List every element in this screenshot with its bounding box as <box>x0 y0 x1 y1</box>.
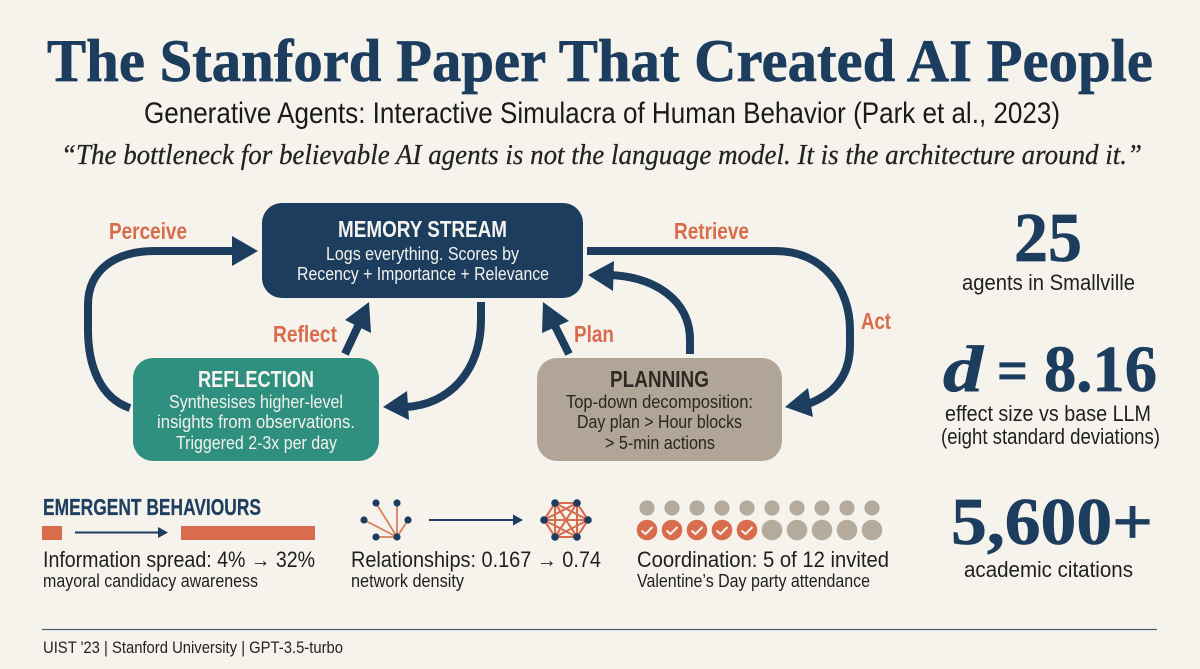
planning description: Day plan > Hour blocks <box>577 411 742 432</box>
panel: planning <box>537 358 782 461</box>
reflection description: Triggered 2-3x per day <box>176 432 338 453</box>
memory stream heading: MEMORY STREAM <box>338 216 507 242</box>
emergent behaviours heading: EMERGENT BEHAVIOURS <box>43 494 261 520</box>
icon: sparse network <box>360 499 412 541</box>
text: coordination <box>637 547 889 591</box>
stat: effect size: d <box>943 333 984 406</box>
bar chart: information spread <box>42 526 315 540</box>
stat: effect size: = <box>997 338 1028 404</box>
arrow: plan <box>542 302 569 354</box>
text: relationships: network density <box>351 571 464 591</box>
title: The Stanford Paper That Created AI People <box>47 28 1153 94</box>
subtitle: Generative Agents: Interactive Simulacra of Human Behavior (Park et al., 2023) <box>144 97 1060 130</box>
reflection description: insights from observations. <box>157 411 355 432</box>
network diagram: sparse to dense <box>360 499 592 541</box>
label: retrieve: Retrieve <box>674 218 749 244</box>
reflection description <box>157 391 355 453</box>
stat: citations: academic citations <box>964 557 1133 582</box>
text: relationships <box>351 547 601 591</box>
text: coordination: Coordination: 5 of 12 invited <box>637 547 889 572</box>
planning description: Top-down decomposition: <box>566 391 753 412</box>
stat: 25 agents: agents in Smallville <box>962 270 1135 295</box>
text: information spread: Information spread: 4% → 32% <box>43 547 315 572</box>
arrow: network <box>429 514 523 526</box>
arrow: retrieve and act <box>587 251 850 417</box>
text: coordination: Valentine’s Day party attendance <box>637 571 870 591</box>
arrow: planning to memory curve <box>588 261 690 354</box>
stat: effect size: (eight standard deviations) <box>941 424 1160 449</box>
reflection heading: REFLECTION <box>198 366 314 392</box>
label: reflect: Reflect <box>273 321 337 347</box>
label: perceive: Perceive <box>109 218 187 244</box>
icon: attendance dots <box>637 500 882 540</box>
stat: 25 agents: 25 <box>1014 200 1082 277</box>
icon: dense network <box>540 499 592 541</box>
reflection description: Synthesises higher-level <box>169 391 343 412</box>
label: plan: Plan <box>574 321 614 347</box>
text: relationships: Relationships: 0.167 → 0.74 <box>351 547 601 572</box>
planning description <box>566 391 753 453</box>
quote: “The bottleneck for believable AI agents is not the language model. It is the architecture around it.” <box>61 140 1142 171</box>
label: act: Act <box>861 308 891 334</box>
stat: effect size <box>941 333 1160 449</box>
planning heading: PLANNING <box>610 366 709 392</box>
footer: UIST '23 | Stanford University | GPT-3.5-turbo <box>43 638 343 657</box>
arrow: reflect <box>345 302 371 354</box>
text: information spread <box>43 547 315 591</box>
stat: effect size: 8.16 <box>1044 333 1157 406</box>
memory stream description: Recency + Importance + Relevance <box>297 263 549 284</box>
stat: effect size: effect size vs base LLM <box>945 401 1151 426</box>
stat: 25 agents <box>962 200 1135 295</box>
panel: reflection <box>133 358 379 461</box>
arrow: memory to reflection <box>383 302 481 420</box>
memory stream description: Logs everything. Scores by <box>326 243 520 264</box>
stat: citations: 5,600+ <box>951 485 1153 559</box>
arrow: perceive <box>88 236 258 408</box>
panel: memory stream <box>262 203 583 298</box>
planning description: > 5-min actions <box>605 432 715 453</box>
text: information spread: mayoral candidacy awareness <box>43 571 258 591</box>
memory stream description <box>297 243 549 284</box>
